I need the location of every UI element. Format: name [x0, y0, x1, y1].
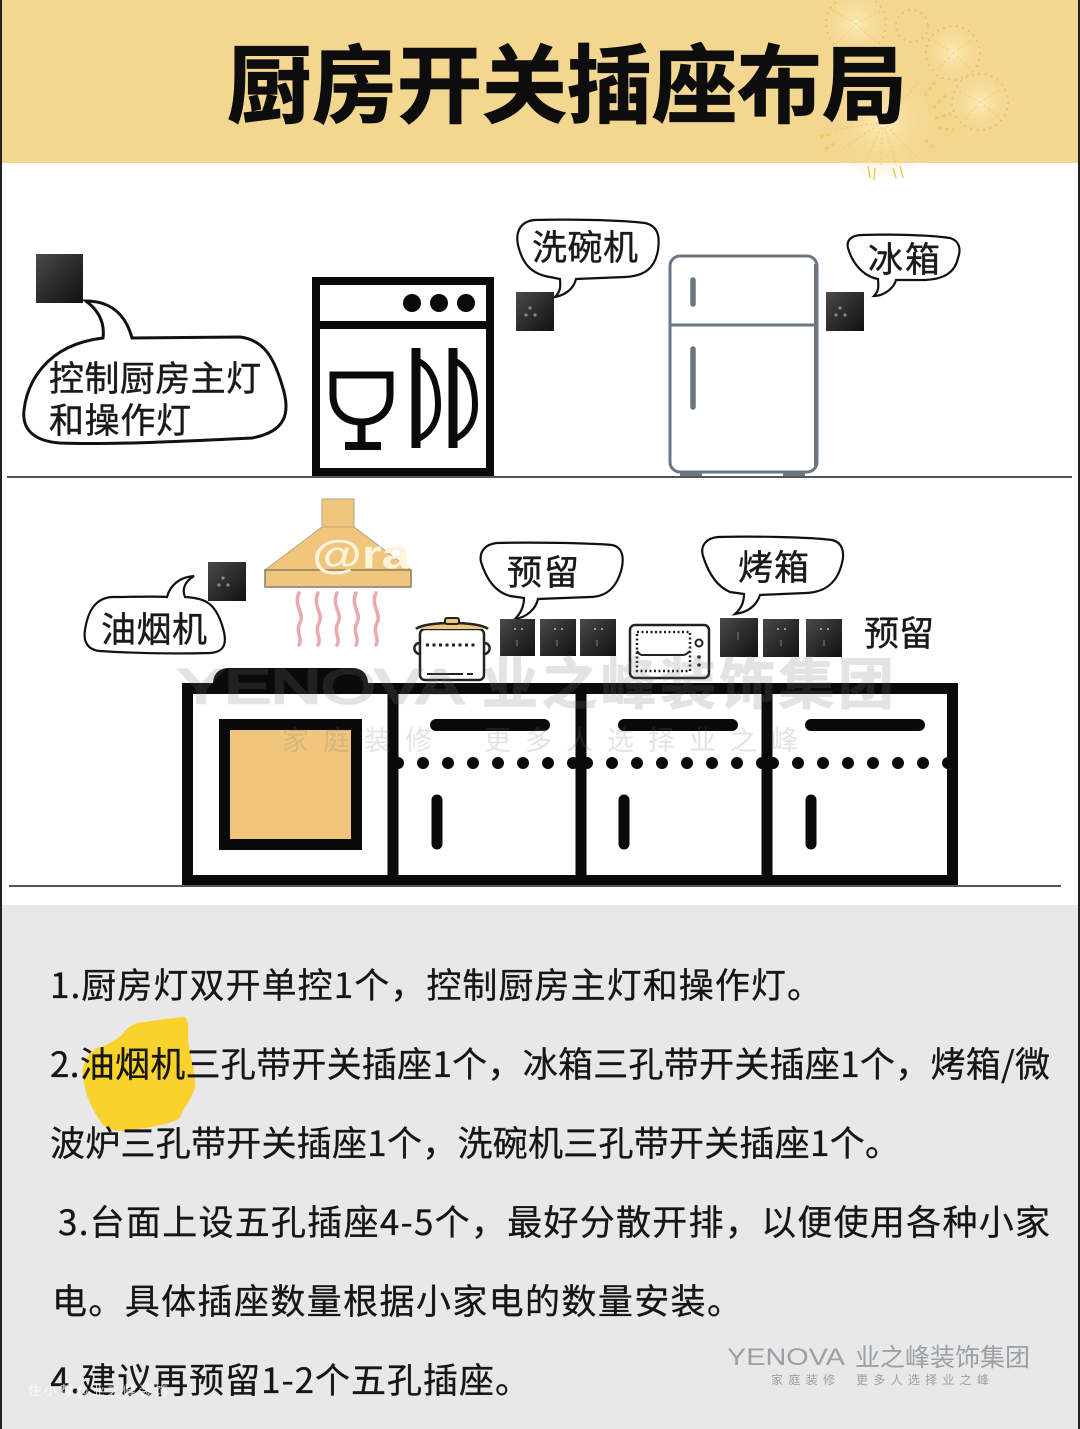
callout: oven: 烤箱	[738, 549, 809, 588]
gray notes panel	[0, 905, 1078, 1429]
callout: fridge: 冰箱	[868, 241, 940, 280]
cabinet counter	[188, 668, 952, 880]
callout: main light: 控制厨房主灯	[49, 360, 261, 399]
watermark: center: 更多人选择业之峰	[484, 726, 798, 756]
callout: dishwasher	[517, 220, 659, 297]
callout: oven	[702, 537, 843, 614]
icon: microwave oven	[630, 625, 709, 678]
callout: range hood: 油烟机	[101, 611, 207, 650]
notes text: 波炉三孔带开关插座1个，洗碗机三孔带开关插座1个。	[50, 1116, 900, 1167]
watermark: center: YENOVA	[178, 661, 463, 714]
callout: reserved: 预留	[507, 554, 579, 593]
logo: brand watermark: YENOVA	[727, 1344, 845, 1371]
floor line upper	[7, 476, 1072, 478]
notes text: 4.建议再预留1-2个五孔插座。	[50, 1353, 530, 1404]
notes text: 电。具体插座数量根据小家电的数量安装。	[52, 1274, 742, 1325]
callout: dishwasher: 洗碗机	[532, 229, 638, 268]
steam	[297, 593, 378, 645]
highlight: yellow marker	[82, 1017, 195, 1131]
switch: main light	[36, 254, 83, 303]
logo: brand watermark: 业之峰装饰集团	[855, 1344, 1030, 1372]
icon: range hood	[265, 499, 411, 587]
callout: fridge	[848, 235, 959, 296]
watermark: center	[178, 653, 894, 756]
header band	[0, 0, 1078, 163]
watermark: center: 业之峰装饰集团	[482, 653, 894, 716]
notes text: 1.厨房灯双开单控1个，控制厨房主灯和操作灯。	[50, 958, 822, 1009]
notes text	[50, 958, 1050, 1404]
callout: main light: 和操作灯	[49, 402, 191, 441]
icon: pot	[414, 618, 490, 680]
notes text: 3.台面上设五孔插座4-5个，最好分散开排，以便使用各种小家	[58, 1195, 1050, 1246]
fireworks decoration	[816, 0, 1018, 180]
notes text: 2.油烟机三孔带开关插座1个，冰箱三孔带开关插座1个，烤箱/微	[50, 1037, 1050, 1088]
watermark: center: 家庭装修	[282, 726, 432, 756]
socket row: reserved right	[720, 618, 842, 657]
logo: brand watermark: 家庭装修	[771, 1372, 835, 1387]
icon: dishwasher	[316, 281, 490, 472]
logo: brand watermark	[727, 1344, 1030, 1387]
callout: main light	[24, 301, 286, 444]
socket row: reserved left	[500, 619, 616, 656]
switch socket: dishwasher	[516, 292, 554, 331]
switch socket: fridge	[826, 292, 864, 331]
source watermark: 住小帮@业之峰装饰	[28, 1383, 168, 1398]
callout: reserved	[481, 543, 623, 619]
logo: brand watermark: 更多人选择业之峰	[856, 1373, 989, 1387]
switch socket: range hood	[208, 562, 246, 601]
title: 厨房开关插座布局	[227, 40, 907, 135]
icon: range hood: @ra	[312, 533, 411, 577]
callout: range hood	[85, 576, 225, 653]
floor line lower	[9, 885, 1061, 887]
icon: fridge	[670, 256, 817, 474]
label: reserved: 预留	[864, 615, 934, 654]
